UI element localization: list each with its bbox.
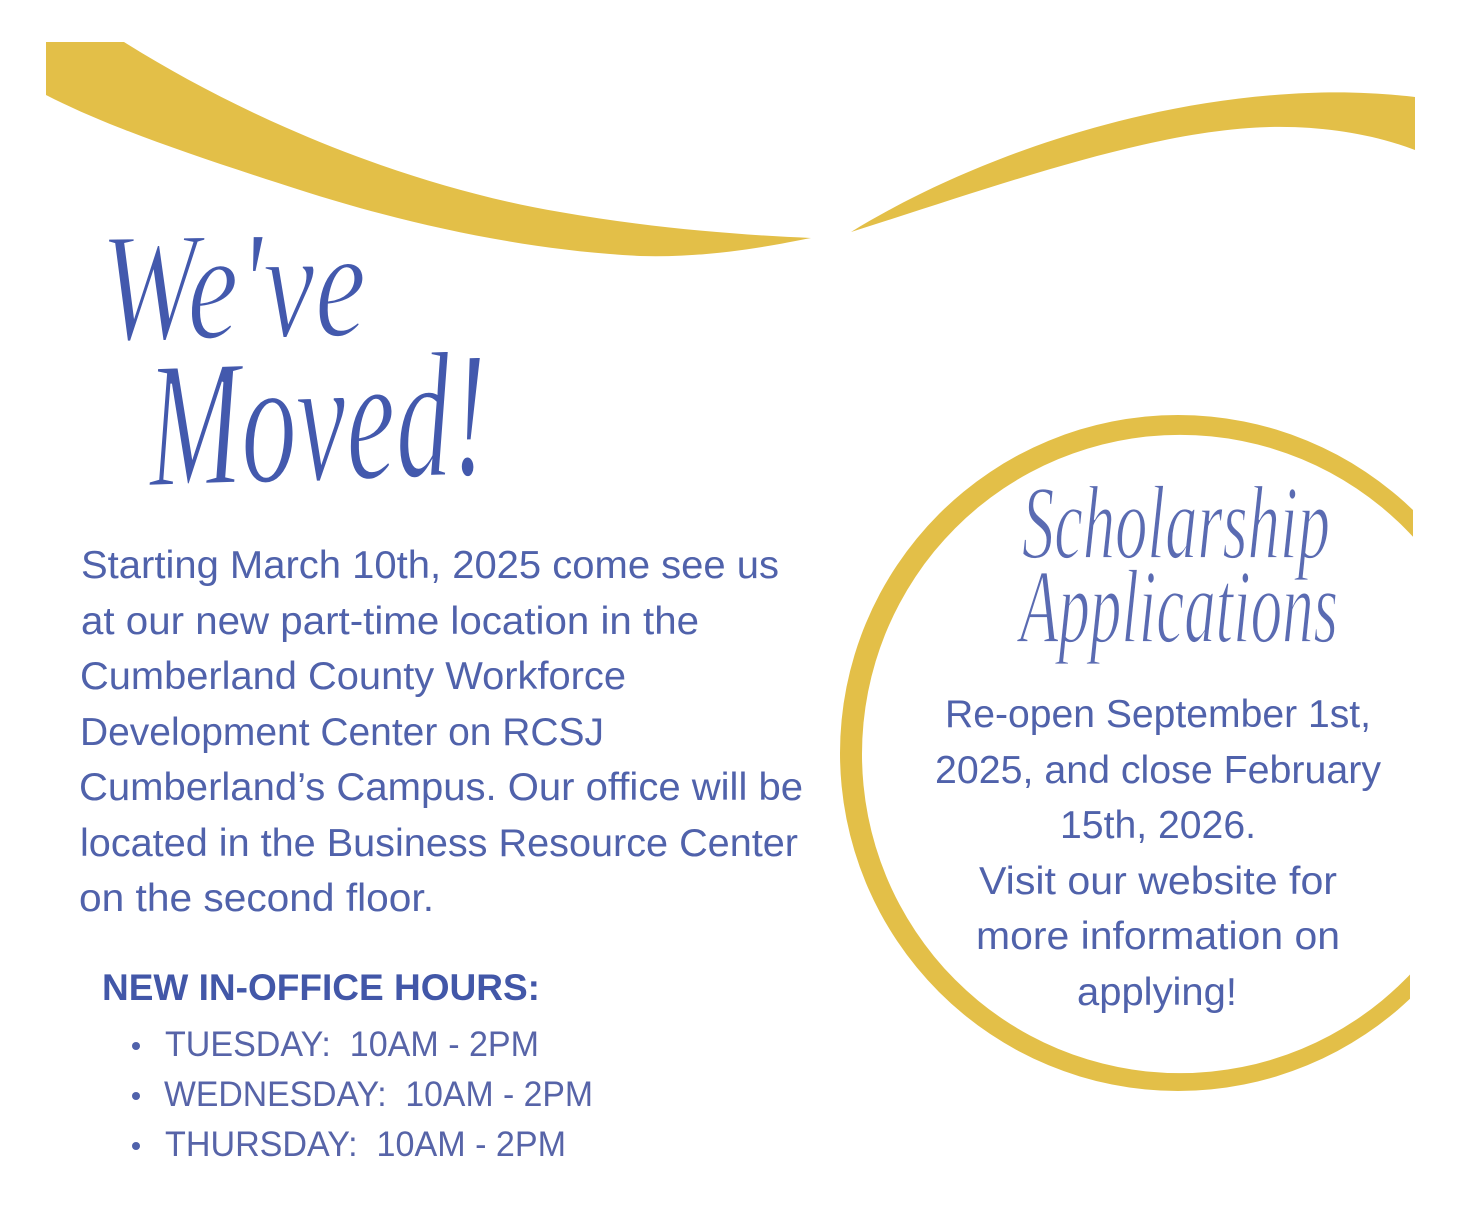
text block: scholarship details: 15th, 2026.: [1060, 804, 1256, 847]
heading: We've Moved!: We've: [100, 197, 368, 374]
text block: scholarship details: more information on: [976, 915, 1340, 958]
list: office hours: [132, 1025, 593, 1164]
text block: move announcement: at our new part-time location in the: [81, 600, 699, 643]
Thursday hours: THURSDAY: 10AM - 2PM: [165, 1125, 566, 1164]
text block: scholarship details: Visit our website for: [979, 860, 1337, 903]
right gold swoosh: [851, 92, 1415, 232]
text block: scholarship details: 2025, and close February: [935, 749, 1381, 792]
text block: scholarship details: [935, 693, 1381, 1014]
text block: move announcement: [79, 544, 803, 920]
heading: scholarship applications: [1016, 464, 1338, 665]
left gold swoosh: [46, 42, 811, 256]
text block: move announcement: Cumberland County Workforce: [80, 655, 626, 698]
gold circle ring: [840, 415, 1470, 1091]
heading: new in-office hours: NEW IN-OFFICE HOURS:: [102, 966, 540, 1008]
text block: move announcement: located in the Business Resource Center: [80, 822, 798, 865]
text block: move announcement: Development Center on RCSJ: [80, 711, 604, 754]
text block: move announcement: Cumberland’s Campus. Our office will be: [79, 766, 803, 809]
Wednesday hours: WEDNESDAY: 10AM - 2PM: [164, 1075, 593, 1114]
Tuesday hours: TUESDAY: 10AM - 2PM: [165, 1025, 539, 1064]
heading: We've Moved!: [100, 197, 491, 525]
heading: We've Moved!: Moved!: [143, 314, 491, 525]
text block: move announcement: on the second floor.: [79, 877, 434, 920]
text block: scholarship details: applying!: [1077, 971, 1237, 1014]
text block: scholarship details: Re-open September 1st,: [945, 693, 1371, 736]
text block: move announcement: Starting March 10th, 2025 come see us: [81, 544, 779, 587]
